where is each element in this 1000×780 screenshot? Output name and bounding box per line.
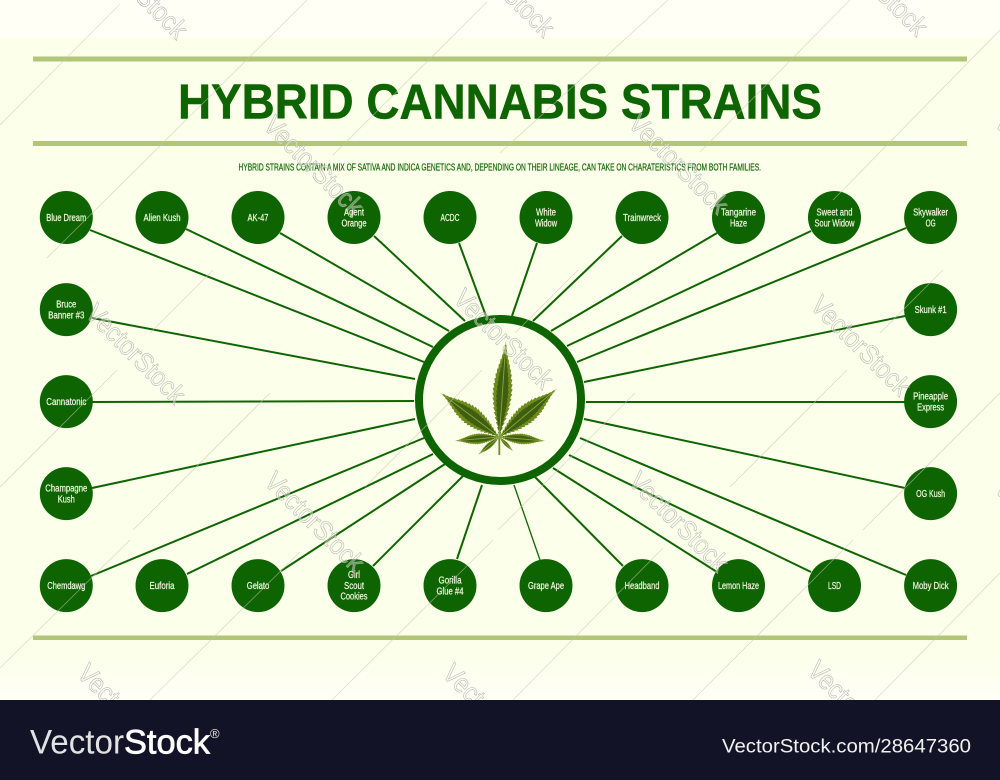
footer logo: Vector bbox=[30, 723, 124, 761]
node: White Widow: Widow bbox=[535, 218, 558, 229]
node: AK-47 bbox=[232, 191, 284, 244]
node: Bruce Banner #3: Banner #3 bbox=[48, 310, 85, 321]
node: Skunk #1 bbox=[904, 283, 957, 336]
node: Euforia bbox=[136, 559, 188, 612]
watermark overlay: VectorStock bbox=[72, 658, 184, 770]
footer bar bbox=[0, 700, 1000, 780]
node: Grape Ape: Grape Ape bbox=[528, 581, 564, 592]
node: ACDC: ACDC bbox=[440, 213, 460, 224]
node: White Widow bbox=[520, 191, 572, 244]
node: Agent Orange: Orange bbox=[342, 218, 367, 229]
node: Girl Scout Cookies: Girl bbox=[348, 570, 360, 581]
node: Headband bbox=[616, 559, 668, 612]
node: Gelato bbox=[232, 559, 284, 612]
node: Alien Kush: Alien Kush bbox=[144, 213, 180, 224]
node: Lemon Haze: Lemon Haze bbox=[718, 581, 759, 592]
node: Champagne Kush: Champagne bbox=[45, 483, 88, 494]
node: Agent Orange: Agent bbox=[344, 207, 364, 218]
top rule bbox=[33, 56, 967, 62]
node: Gorilla Glue #4: Gorilla bbox=[438, 575, 462, 586]
node: Tangarine Haze: Haze bbox=[730, 218, 747, 229]
node: Champagne Kush: Kush bbox=[58, 494, 75, 505]
node: Girl Scout Cookies: Scout bbox=[344, 581, 364, 592]
connector lines bbox=[90, 228, 906, 576]
footer logo bbox=[30, 723, 220, 761]
central ring bbox=[419, 319, 581, 481]
node: Pineapple Express: Express bbox=[917, 402, 944, 413]
watermark overlay: VectorStock bbox=[448, 283, 560, 395]
node: ACDC bbox=[424, 191, 476, 244]
node: Gorilla Glue #4 bbox=[424, 559, 476, 612]
node: Alien Kush bbox=[136, 191, 188, 244]
node: Blue Dream: Blue Dream bbox=[46, 213, 86, 224]
node: Cannatonic bbox=[40, 375, 93, 428]
node: Champagne Kush bbox=[40, 467, 93, 520]
watermark overlay: VectorStock bbox=[805, 290, 917, 402]
watermark overlay: VectorStock bbox=[259, 466, 371, 578]
watermark overlay: VectorStock bbox=[623, 108, 735, 220]
node: Bruce Banner #3: Bruce bbox=[56, 299, 77, 310]
footer logo: Stock bbox=[124, 723, 211, 761]
node: Sweet and Sour Widow: Sour Widow bbox=[814, 218, 855, 229]
node: Skywalker OG bbox=[904, 191, 957, 244]
node: Euforia: Euforia bbox=[150, 581, 175, 592]
node: Skywalker OG: Skywalker bbox=[913, 207, 949, 218]
node: Moby Dick: Moby Dick bbox=[913, 581, 949, 592]
node: Agent Orange bbox=[328, 191, 380, 244]
node: Cannatonic: Cannatonic bbox=[46, 397, 86, 408]
node: Blue Dream bbox=[40, 191, 93, 244]
node: Chemdawg: Chemdawg bbox=[47, 581, 85, 592]
node: LSD bbox=[808, 559, 861, 612]
node: Chemdawg bbox=[40, 559, 93, 612]
node: Trainwreck bbox=[616, 191, 668, 244]
node: Pineapple Express bbox=[904, 375, 957, 428]
node: AK-47: AK-47 bbox=[248, 213, 269, 224]
node: Gorilla Glue #4: Glue #4 bbox=[436, 586, 464, 597]
node: Bruce Banner #3 bbox=[40, 283, 93, 336]
node: Lemon Haze bbox=[712, 559, 765, 612]
node: OG Kush: OG Kush bbox=[916, 489, 945, 500]
node: Pineapple Express: Pineapple bbox=[913, 391, 948, 402]
node: Girl Scout Cookies: Cookies bbox=[340, 592, 368, 603]
node: Headband: Headband bbox=[624, 581, 660, 592]
icon: cannabis leaf bbox=[434, 340, 564, 457]
watermark overlay: VectorStock bbox=[258, 110, 370, 222]
watermark overlay: VectorStock bbox=[802, 655, 914, 767]
node: Sweet and Sour Widow: Sweet and bbox=[816, 207, 852, 218]
node: Tangarine Haze bbox=[712, 191, 765, 244]
node: Gelato: Gelato bbox=[247, 581, 270, 592]
title: HYBRID CANNABIS STRAINS bbox=[178, 76, 822, 130]
footer logo: ® bbox=[210, 726, 220, 741]
node: Trainwreck: Trainwreck bbox=[623, 213, 662, 224]
node: Sweet and Sour Widow bbox=[808, 191, 861, 244]
node: Tangarine Haze: Tangarine bbox=[721, 207, 756, 218]
watermark overlay: VectorStock bbox=[437, 658, 549, 770]
title rule bbox=[33, 141, 967, 146]
node: White Widow: White bbox=[536, 207, 556, 218]
node: Grape Ape bbox=[520, 559, 572, 612]
node: Moby Dick bbox=[904, 559, 957, 612]
node: OG Kush bbox=[904, 467, 957, 520]
watermark overlay: VectorStock bbox=[623, 466, 735, 578]
node: Girl Scout Cookies bbox=[328, 559, 380, 612]
node: LSD: LSD bbox=[828, 581, 841, 592]
watermark overlay: VectorStock bbox=[80, 298, 192, 410]
node: Skunk #1: Skunk #1 bbox=[915, 305, 947, 316]
bottom rule bbox=[33, 636, 967, 640]
footer url: VectorStock.com/28647360 bbox=[722, 737, 971, 758]
node: Skywalker OG: OG bbox=[926, 218, 936, 229]
